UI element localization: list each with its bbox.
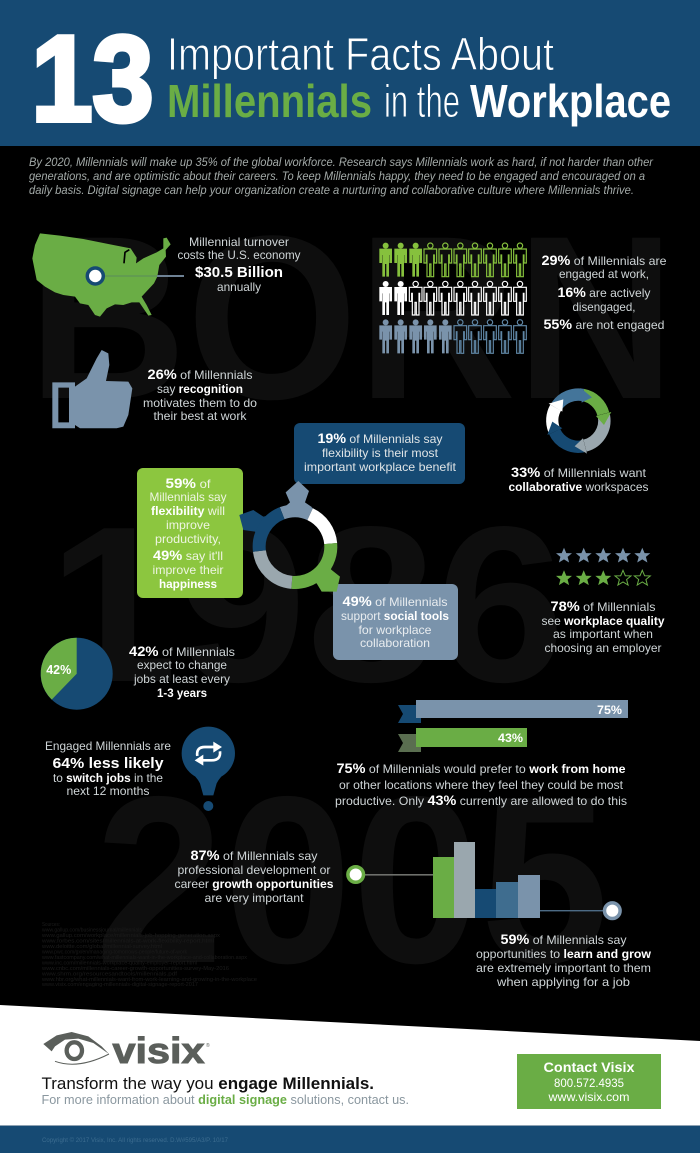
sources list: www.hbr.org/what-millennials-want-from-work-learning-and-growing-in-the-workplace <box>42 977 257 983</box>
fact: workplace quality <box>542 548 665 655</box>
wordmark: visix <box>112 1030 204 1071</box>
text: costs the U.S. economy <box>178 248 300 262</box>
fact: job change <box>41 638 235 710</box>
icon: pin with repeat arrows <box>182 727 235 811</box>
text: for workplace <box>358 623 432 637</box>
fact: collaborative workspaces <box>508 388 648 494</box>
text: flexibility is their most <box>322 446 439 460</box>
text: are very important <box>204 891 304 905</box>
text <box>341 593 449 650</box>
contact box: 800.572.4935 <box>554 1076 624 1090</box>
icon: thumbs up <box>52 350 132 428</box>
text: say recognition <box>157 382 243 396</box>
intro paragraph: daily basis. Digital signage can help your organization create a nurturing and collaborative culture where Millennials thrive. <box>29 183 634 197</box>
chart: vertical bars <box>433 842 540 918</box>
chart: horizontal bars: 43% <box>498 731 523 745</box>
text: productivity, <box>155 532 221 546</box>
text: motivates them to do <box>143 396 257 410</box>
title line 2 <box>167 75 671 127</box>
icon: star ratings <box>556 548 650 585</box>
text: happiness <box>159 577 217 591</box>
text <box>178 235 300 294</box>
contact box <box>517 1054 661 1109</box>
sources list: www.deloitte.com/global/millennial-survey.html <box>42 944 162 950</box>
text: 1-3 years <box>157 686 207 700</box>
text: professional development or <box>178 863 330 877</box>
text: Engaged Millennials are <box>45 739 171 753</box>
text: 16% are actively <box>558 284 650 300</box>
text: 42% of Millennials <box>129 643 235 659</box>
text: their best at work <box>154 409 248 423</box>
ghost background year: 1986: 1986 <box>48 481 565 729</box>
text: expect to change <box>137 658 227 672</box>
fact: career growth <box>174 847 433 905</box>
text: 55% are not engaged <box>544 316 664 332</box>
contact box: Contact Visix <box>544 1059 635 1075</box>
title line 2: Workplace <box>470 75 671 127</box>
title number 13: 13 <box>32 10 154 146</box>
sources list: www.shrm.org/resourcesandtools/millennials.pdf <box>42 972 178 978</box>
sources list <box>42 922 257 988</box>
text: 59% of Millennials say <box>500 931 626 947</box>
chart: horizontal bars <box>398 700 628 752</box>
text: support social tools <box>341 609 449 623</box>
panel: flexibility productivity <box>137 468 243 598</box>
contact box: www.visix.com <box>547 1090 630 1104</box>
icon: cycle arrows <box>547 388 611 454</box>
header banner <box>0 0 700 146</box>
text: 78% of Millennials <box>550 598 656 614</box>
text: productive. Only 43% currently are allowed to do this <box>335 792 627 808</box>
text: 33% of Millennials want <box>511 464 647 480</box>
intro paragraph <box>29 155 654 197</box>
text: 75% of Millennials would prefer to work from home <box>336 760 626 776</box>
fact: learn and grow <box>476 903 652 989</box>
tagline: Transform the way you engage Millennials. <box>42 1074 374 1093</box>
text: 29% of Millennials are <box>542 252 667 268</box>
text: annually <box>217 280 261 294</box>
intro paragraph: By 2020, Millennials will make up 35% of the global workforce. Research says Millennials work as hard, if not harder than other <box>29 155 654 169</box>
text <box>304 430 457 474</box>
text: disengaged, <box>572 300 636 314</box>
chart: pie 42%: 42% <box>46 663 71 677</box>
chart: segmented ring with connectors <box>239 481 340 592</box>
text: flexibility will <box>151 504 225 518</box>
text: opportunities to learn and grow <box>476 947 652 961</box>
connector dot and line <box>348 867 433 882</box>
footer <box>0 1005 700 1125</box>
sources list: www.pwc.com/gx/en/managing-tomorrows-people/future-of-work <box>42 950 188 956</box>
ghost background year: 2005: 2005 <box>95 748 609 1013</box>
text: choosing an employer <box>544 641 662 655</box>
text: $30.5 Billion <box>195 265 283 281</box>
icon: people grid <box>379 243 526 353</box>
sources list: www.gallup.com/businessjournal/millennials <box>42 928 143 934</box>
contact line: For more information about digital signage solutions, contact us. <box>42 1093 409 1107</box>
icon: US map <box>32 233 171 317</box>
text: to switch jobs in the <box>53 771 163 785</box>
sources list: www.forbes.com/sites/millennials-at-work-flexibility-report.html <box>42 938 214 944</box>
copyright bar <box>0 1125 700 1153</box>
chart: pie 42% <box>41 638 113 710</box>
connector knobs <box>239 481 340 592</box>
fact: recognition <box>52 350 257 428</box>
panel: social tools <box>333 584 458 660</box>
text: collaborative workspaces <box>508 480 648 494</box>
intro paragraph: generations, and are optimistic about their careers. To keep Millennials happy, they need to be engaged and encouraged on a <box>29 169 645 183</box>
fact: turnover cost <box>32 233 300 317</box>
sources list: www.cnbc.com/millennials-career-growth-opportunities-survey-May-2016 <box>42 966 229 972</box>
panel: flexibility benefit <box>294 423 465 484</box>
fact: engagement <box>379 243 667 353</box>
text: jobs at least every <box>133 672 230 686</box>
connector line and dot <box>540 903 620 918</box>
text: 59% of <box>166 475 211 491</box>
text: when applying for a job <box>496 975 630 989</box>
text: next 12 months <box>66 784 150 798</box>
text <box>143 366 257 423</box>
text: see workplace quality <box>542 614 665 628</box>
chart: horizontal bars: 75% <box>597 703 622 717</box>
logo: visix: ® <box>206 1042 210 1049</box>
text: engaged at work, <box>559 267 649 281</box>
text <box>476 931 652 989</box>
text: 26% of Millennials <box>148 366 252 382</box>
text <box>542 252 667 332</box>
fact: switching jobs <box>45 727 235 811</box>
text <box>542 598 665 655</box>
text <box>174 847 334 905</box>
title line 2: Millennials <box>167 75 372 127</box>
map leader line <box>104 275 184 277</box>
text: Millennial turnover <box>189 235 289 249</box>
copyright bar: Copyright © 2017 Visix, Inc. All rights reserved. D.W#595/A3/P. 10/17 <box>42 1137 229 1144</box>
map pin <box>87 268 103 284</box>
title line 1: Important Facts About <box>167 28 554 80</box>
text: 87% of Millennials say <box>190 847 318 863</box>
text: 64% less likely <box>52 756 164 772</box>
text: collaboration <box>360 636 430 650</box>
text: career growth opportunities <box>174 877 334 891</box>
text <box>508 464 648 494</box>
logo: visix <box>43 1030 210 1071</box>
sources list: www.inc.com/millennials-workplace-quality-employer-report.html <box>42 960 197 966</box>
ghost background word: BORN: BORN <box>28 188 675 448</box>
text: 19% of Millennials say <box>318 430 442 446</box>
text: are extremely important to them <box>476 961 651 975</box>
title line 2: in the <box>384 75 460 127</box>
text: as important when <box>553 627 653 641</box>
fact: work from home <box>335 700 628 808</box>
text <box>45 739 171 798</box>
ring segments <box>259 511 331 582</box>
eye mark <box>43 1032 109 1064</box>
text <box>150 475 226 591</box>
text: 49% of Millennials <box>342 593 448 609</box>
text: Millennials say <box>150 490 226 504</box>
text <box>129 643 235 700</box>
text <box>335 760 627 808</box>
sources list: www.visix.com/engaging-millennials-digital-signage-report-2017 <box>42 982 198 988</box>
text: or other locations where they feel they could be most <box>339 778 624 792</box>
text: 49% say it'll <box>153 547 223 563</box>
text: important workplace benefit <box>304 460 457 474</box>
text: improve their <box>152 563 224 577</box>
sources list: www.fastcompany.com/what-millennials-want-in-the-workplace-and-collaboration.aspx <box>42 955 248 961</box>
sources list: Sources: <box>42 922 60 928</box>
text: improve <box>166 518 210 532</box>
sources list: www.gallup.com/workplace/millennials-job-hopping-generation.aspx <box>42 933 221 939</box>
